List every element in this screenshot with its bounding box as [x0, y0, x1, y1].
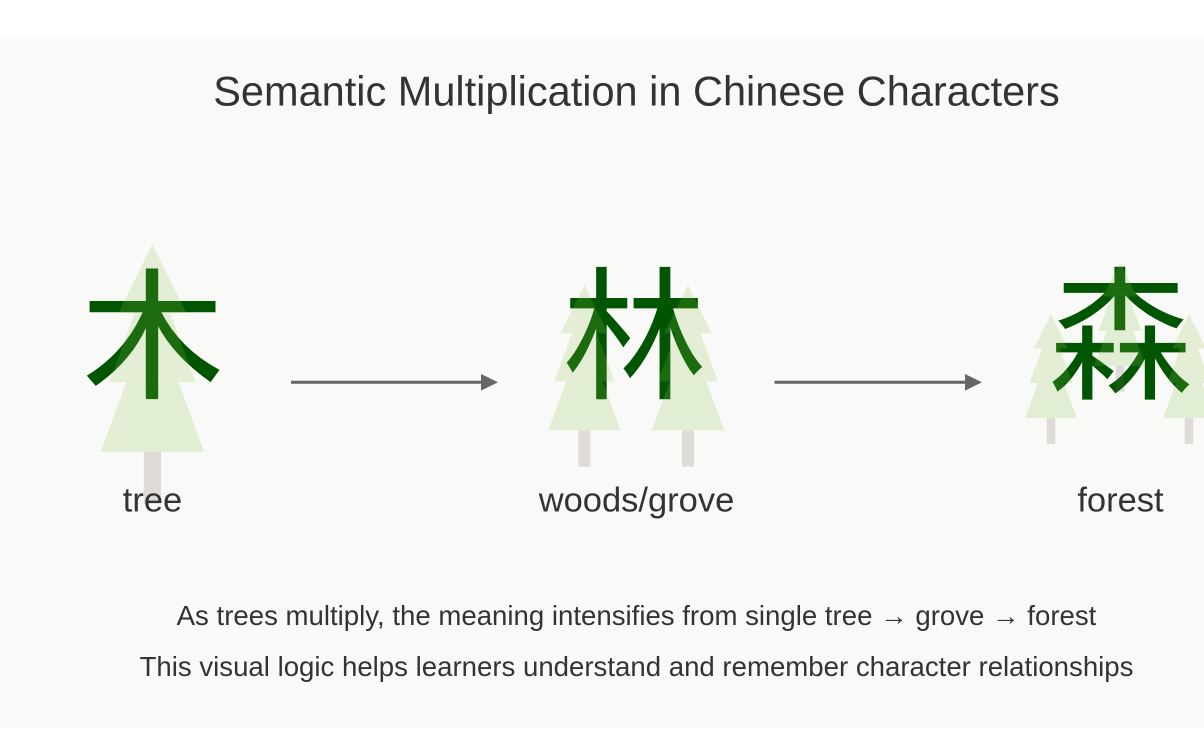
icon: right tree: [652, 285, 724, 467]
label: forest: forest: [1077, 482, 1164, 520]
label: woods/grove: woods/grove: [538, 482, 734, 520]
title: Semantic Multiplication in Chinese Characters: [213, 68, 1060, 114]
icon: top tree: [1094, 262, 1146, 392]
character: forest: 森: [1048, 222, 1193, 430]
icon: two trees: [548, 285, 724, 467]
icon: left tree: [548, 285, 621, 467]
label: tree: tree: [123, 482, 182, 520]
icon: right tree: [1163, 314, 1204, 444]
arrow: woods to forest: [774, 374, 982, 391]
icon: single tree: [101, 244, 204, 504]
character: woods: 林: [562, 222, 707, 430]
character: tree: 木: [79, 257, 226, 408]
icon: left tree: [1025, 314, 1077, 444]
note: first line: As trees multiply, the meaning intensifies from single tree → grove → forest: [177, 600, 1097, 631]
icon: three trees: [1025, 262, 1204, 444]
arrow: tree to woods: [291, 374, 498, 391]
note: second line: This visual logic helps learners understand and remember character relationships: [140, 651, 1133, 682]
